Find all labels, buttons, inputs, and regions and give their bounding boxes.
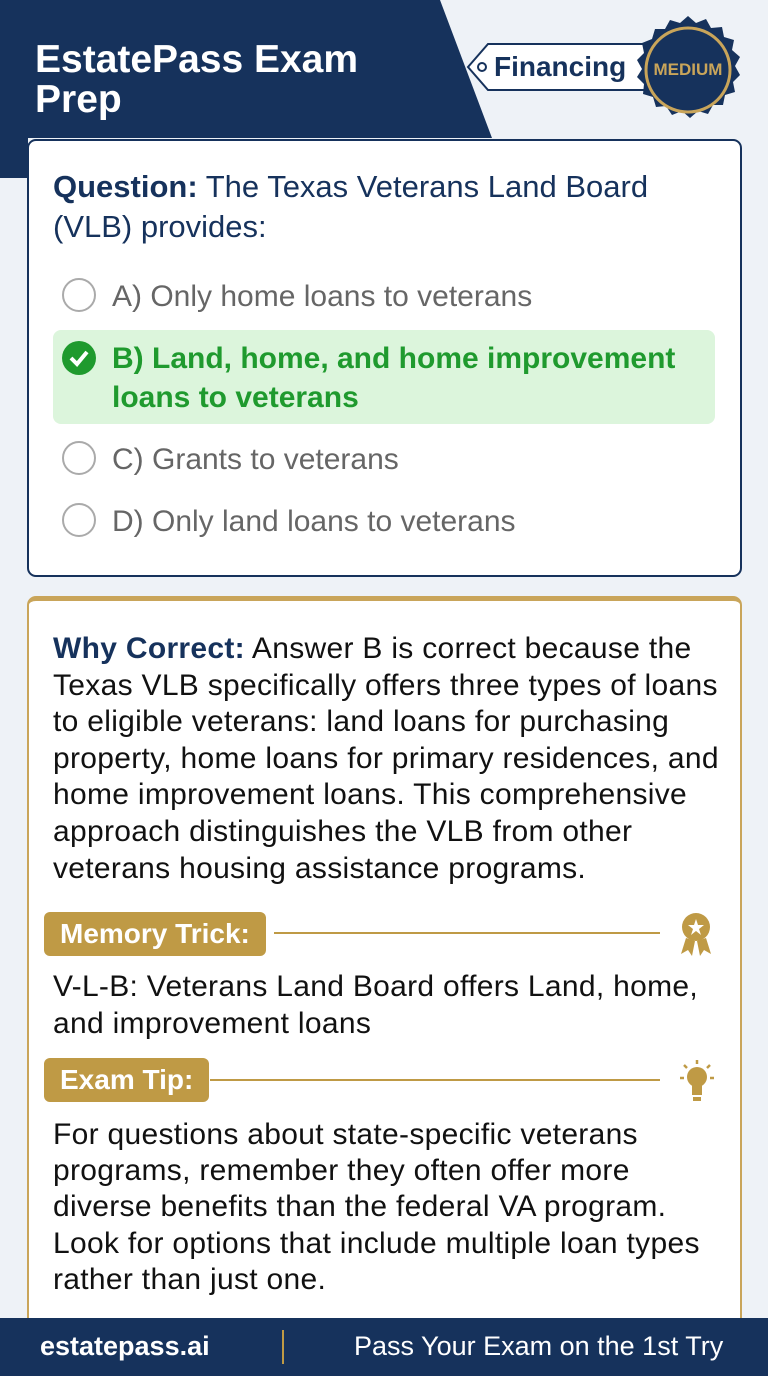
tag: Financing: Financing [494, 51, 626, 82]
memory trick text: and improvement loans [53, 1007, 371, 1040]
memory trick heading [44, 912, 266, 956]
why correct text [53, 632, 719, 885]
icon: award [681, 913, 711, 956]
icon: check [62, 341, 96, 375]
icon: lightbulb [680, 1060, 714, 1101]
header background [0, 0, 492, 178]
footer: estatepass.ai [40, 1331, 210, 1361]
tag: Financing [466, 43, 644, 91]
why correct text: Texas VLB specifically offers three types of loans [53, 669, 718, 702]
badge: MEDIUM: MEDIUM [654, 60, 722, 79]
exam tip heading [44, 1058, 209, 1102]
memory trick text: V-L-B: Veterans Land Board offers Land, home, [53, 970, 698, 1003]
memory trick heading: Memory Trick: [60, 918, 250, 949]
exam tip text: programs, remember they often offer more [53, 1154, 630, 1187]
question text [53, 169, 648, 244]
why correct text: to eligible veterans: land loans for purchasing [53, 705, 669, 738]
exam tip text: diverse benefits than the federal VA program. [53, 1190, 666, 1223]
exam tip text [53, 1118, 700, 1296]
exam tip text: rather than just one. [53, 1263, 326, 1296]
why correct text: approach distinguishes the VLB from other [53, 815, 632, 848]
exam tip heading: Exam Tip: [60, 1064, 193, 1095]
footer [0, 1318, 768, 1376]
option B correct: loans to veterans [112, 381, 359, 414]
exam tip text: For questions about state-specific veterans [53, 1118, 638, 1151]
title [35, 38, 358, 121]
option B correct [53, 330, 715, 424]
option B correct: B) Land, home, and home improvement [112, 342, 675, 375]
explanation card [27, 596, 742, 1356]
question card [27, 139, 742, 577]
footer: Pass Your Exam on the 1st Try [354, 1331, 723, 1361]
option C: C) Grants to veterans [112, 443, 399, 476]
option A: A) Only home loans to veterans [112, 280, 532, 313]
why correct text: home improvement loans. This comprehensive [53, 778, 687, 811]
option D: D) Only land loans to veterans [112, 505, 516, 538]
title: EstatePass Exam [35, 38, 358, 81]
why correct text: Why Correct: Answer B is correct because the [53, 632, 691, 665]
why correct text: property, home loans for primary residences, and [53, 742, 719, 775]
why correct text: veterans housing assistance programs. [53, 852, 586, 885]
exam tip text: Look for options that include multiple loan types [53, 1227, 700, 1260]
title: Prep [35, 78, 122, 121]
question text: Question: The Texas Veterans Land Board [53, 169, 648, 204]
memory trick text [53, 970, 698, 1040]
question text: (VLB) provides: [53, 209, 267, 244]
badge: MEDIUM [637, 16, 740, 118]
